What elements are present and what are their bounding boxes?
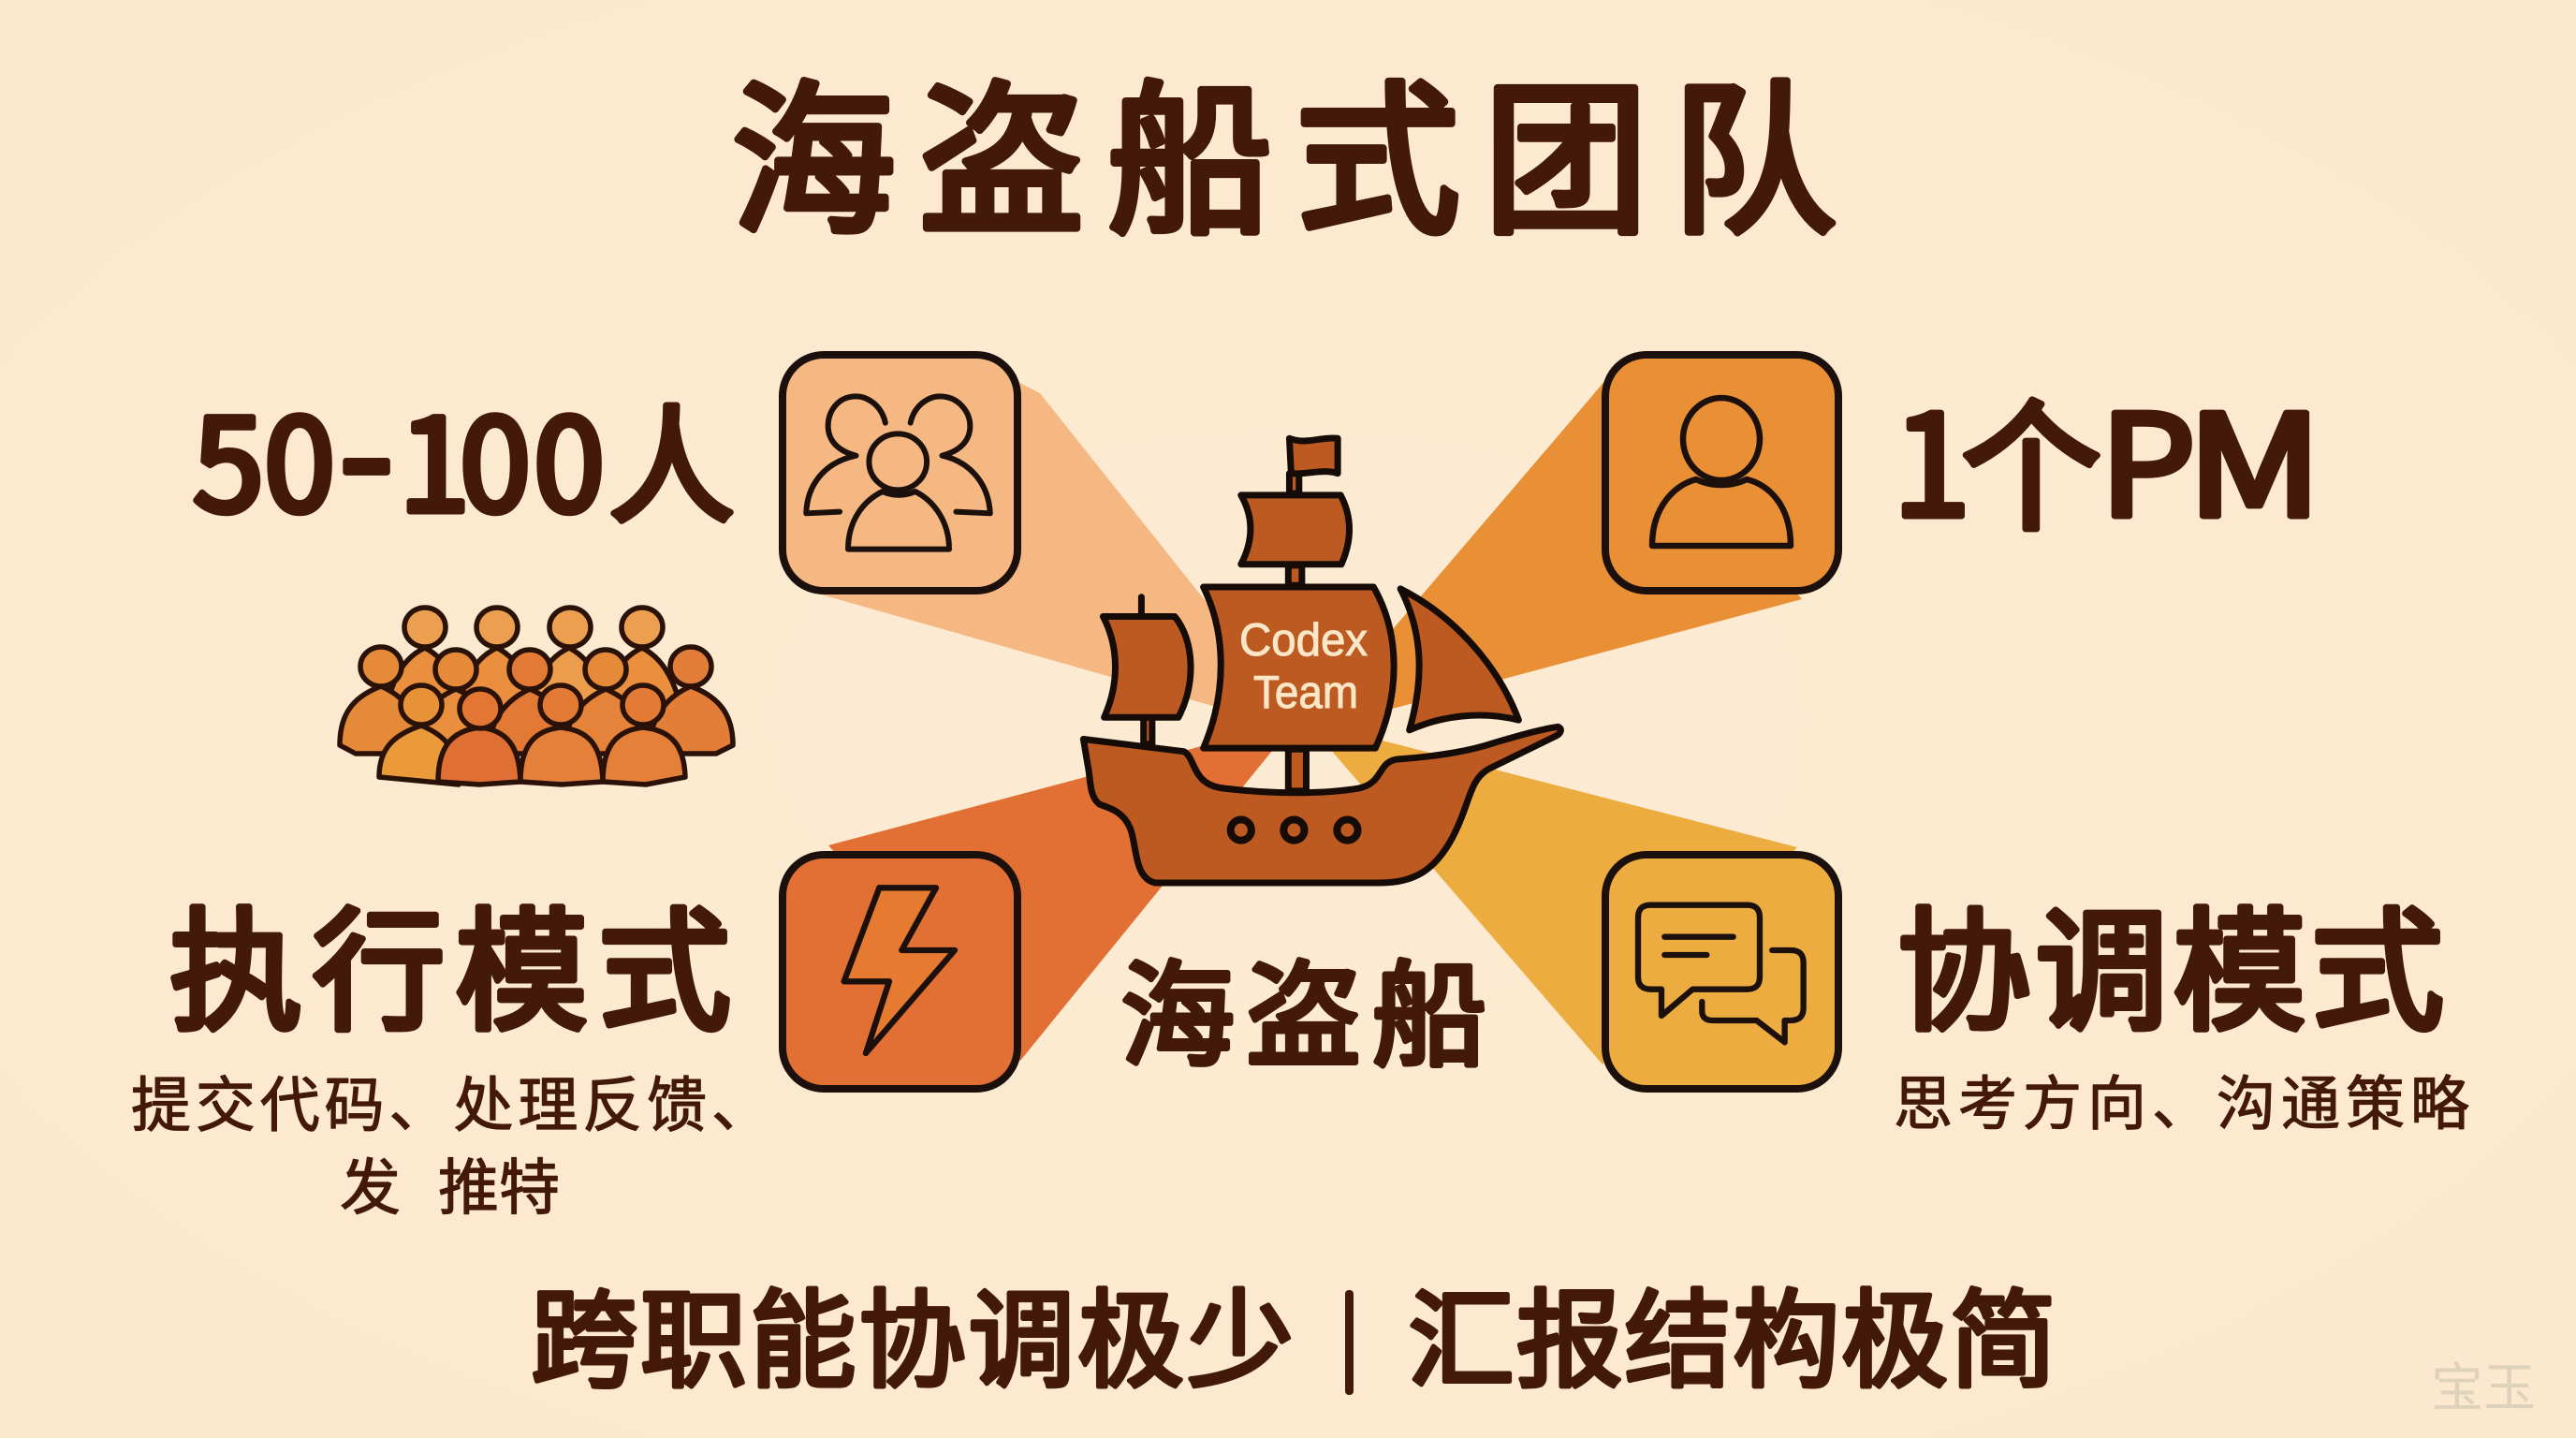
heading: team size: 50 bbox=[193, 363, 335, 549]
crowd of people bbox=[340, 608, 733, 785]
heading: execution mode: 执行模式 bbox=[169, 864, 731, 1057]
ray: bottom right bbox=[1306, 721, 1797, 1064]
title: 海盗船式团队 bbox=[731, 28, 1837, 267]
flag bbox=[1289, 438, 1338, 474]
text: execution description line 2: 推特 bbox=[438, 1138, 560, 1226]
heading: team size: 100 bbox=[399, 363, 605, 549]
sail text: Team bbox=[1253, 668, 1358, 718]
sail text: Codex bbox=[1239, 615, 1368, 666]
heading: one PM: P bbox=[2100, 354, 2196, 557]
bottom separator bbox=[1345, 1290, 1354, 1395]
text: coordination description: 思考方向、沟通策略 bbox=[1894, 1057, 2469, 1142]
left sail bbox=[1103, 616, 1191, 717]
ray: top right bbox=[1305, 374, 1802, 732]
main sail bbox=[1204, 587, 1394, 748]
panel: team size icon bbox=[783, 355, 1017, 591]
heading: team size: - bbox=[339, 327, 394, 557]
ship illustration bbox=[1083, 438, 1560, 883]
icon: group of people bbox=[806, 396, 990, 550]
hull bbox=[1083, 726, 1560, 883]
heading: one PM: M bbox=[2187, 354, 2322, 557]
icon: chat bubbles bbox=[1638, 905, 1804, 1042]
ray: top left bbox=[821, 382, 1311, 734]
jib sail bbox=[1400, 589, 1518, 730]
heading: one PM bbox=[1893, 354, 2322, 559]
portholes bbox=[1231, 820, 1358, 841]
top sail bbox=[1241, 495, 1349, 565]
text: execution description line 2: 发 bbox=[340, 1138, 401, 1226]
panel: PM icon bbox=[1605, 355, 1838, 591]
sail text bbox=[1239, 615, 1368, 718]
heading: one PM: 1 bbox=[1893, 354, 1970, 557]
panel: coordination icon bbox=[1605, 855, 1838, 1089]
heading: team size: 人 bbox=[608, 364, 735, 548]
icon: single person bbox=[1652, 398, 1791, 546]
heading: one PM: 个 bbox=[1961, 356, 2101, 559]
bottom summary left: 跨职能协调极少 bbox=[531, 1255, 1294, 1409]
icon: lightning bolt bbox=[844, 888, 955, 1053]
watermark: 宝玉 bbox=[2431, 1346, 2536, 1422]
masts bbox=[1144, 474, 1306, 791]
bottom summary right: 汇报结构极简 bbox=[1408, 1255, 2056, 1409]
ray: bottom left bbox=[828, 721, 1296, 1061]
panel: execution icon bbox=[783, 855, 1017, 1089]
heading: coordination mode: 协调模式 bbox=[1897, 864, 2444, 1057]
label: pirate ship: 海盗船 bbox=[1120, 924, 1486, 1090]
text: execution description line 1: 提交代码、处理反馈、 bbox=[131, 1058, 771, 1144]
